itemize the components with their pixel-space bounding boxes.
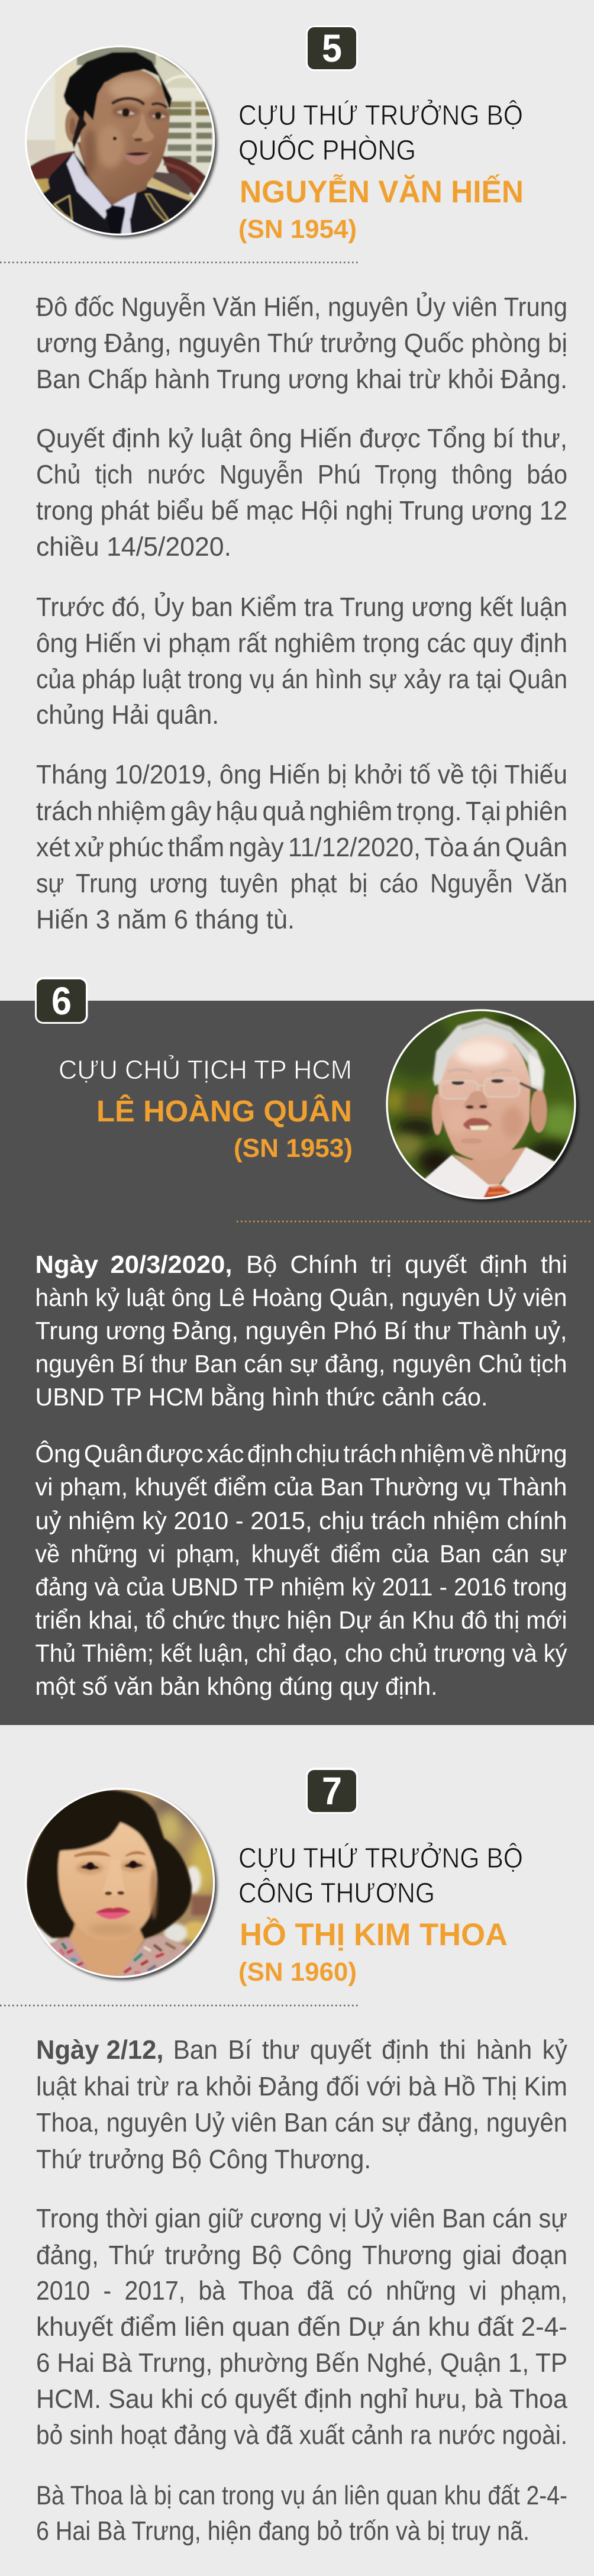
number badge 6 bbox=[35, 977, 88, 1024]
panel: person 6 bbox=[0, 977, 594, 1725]
text block: biography 7: 6 Hai Bà Trưng, hiện đang bỏ trốn và bị truy nã. bbox=[36, 2516, 530, 2546]
heading: role and name 6: CỰU CHỦ TỊCH TP HCM bbox=[59, 1055, 352, 1085]
text block: biography 6: uỷ nhiệm kỳ 2010 - 2015, chịu trách nhiệm chính bbox=[35, 1507, 567, 1534]
text block: biography 7: luật khai trừ ra khỏi Đảng đối với bà Hồ Thị Kim bbox=[36, 2071, 567, 2101]
portrait: Nguyễn Văn Hiến bbox=[24, 43, 219, 241]
text block: biography 5: Trước đó, Ủy ban Kiểm tra Trung ương kết luận bbox=[36, 592, 567, 622]
number badge 6: 6 bbox=[51, 979, 72, 1023]
text block: biography 5: Đô đốc Nguyễn Văn Hiến, nguyên Ủy viên Trung bbox=[36, 292, 567, 322]
text block: biography 6 bbox=[35, 1250, 567, 1700]
number badge 7 bbox=[306, 1768, 358, 1814]
text block: biography 6: Trung ương Đảng, nguyên Phó Bí thư Thành uỷ, bbox=[35, 1317, 567, 1345]
text block: biography 6: về những vi phạm, khuyết điểm của Ban cán sự bbox=[35, 1540, 567, 1568]
panel: person 7 bbox=[0, 1768, 568, 2546]
text block: biography 5: chủng Hải quân. bbox=[36, 699, 219, 730]
text block: biography 5: ông Hiến vi phạm rất nghiêm trọng các quy định bbox=[36, 628, 567, 658]
text block: biography 7: Ban Bí thư quyết định thi hành kỷ bbox=[173, 2035, 567, 2065]
heading: role and name 5: CỰU THỨ TRƯỞNG BỘ bbox=[238, 99, 523, 131]
text block: biography 6: Ngày 20/3/2020, bbox=[35, 1250, 232, 1278]
text block: biography 7: Ngày 2/12, bbox=[36, 2035, 163, 2065]
text block: biography 5: xét xử phúc thẩm ngày 11/12/2020, Tòa án Quân bbox=[36, 832, 567, 862]
panel: person 5 bbox=[0, 25, 567, 934]
heading: role and name 5: (SN 1954) bbox=[238, 215, 357, 244]
text block: biography 5: ương Đảng, nguyên Thứ trưởng Quốc phòng bị bbox=[36, 328, 567, 358]
text block: biography 7: HCM. Sau khi có quyết định nghỉ hưu, bà Thoa bbox=[36, 2384, 568, 2414]
number badge 7: 7 bbox=[322, 1769, 342, 1813]
text block: biography 6: Bộ Chính trị quyết định thi bbox=[246, 1250, 567, 1278]
text block: biography 5: Hiến 3 năm 6 tháng tù. bbox=[36, 904, 295, 934]
text block: biography 6: UBND TP HCM bằng hình thức cảnh cáo. bbox=[35, 1383, 488, 1411]
text block: biography 5: trách nhiệm gây hậu quả nghiêm trọng. Tại phiên bbox=[36, 796, 567, 826]
heading: role and name 5 bbox=[238, 99, 524, 244]
heading: role and name 7 bbox=[238, 1842, 523, 1987]
text block: biography 5: trong phát biểu bế mạc Hội nghị Trung ương 12 bbox=[36, 495, 567, 525]
text block: biography 6: một số văn bản không đúng quy định. bbox=[35, 1672, 438, 1700]
text block: biography 6: đảng và của UBND TP nhiệm kỳ 2011 - 2016 trong bbox=[35, 1573, 567, 1601]
text block: biography 7: 6 Hai Bà Trưng, phường Bến Nghé, Quận 1, TP bbox=[36, 2348, 567, 2378]
text block: biography 6: hành kỷ luật ông Lê Hoàng Quân, nguyên Uỷ viên bbox=[35, 1284, 567, 1311]
text block: biography 5: Quyết định kỷ luật ông Hiến được Tổng bí thư, bbox=[36, 423, 567, 453]
heading: role and name 5: QUỐC PHÒNG bbox=[238, 134, 416, 166]
text block: biography 6: vi phạm, khuyết điểm của Ban Thường vụ Thành bbox=[35, 1473, 567, 1501]
heading: role and name 7: CỰU THỨ TRƯỞNG BỘ bbox=[238, 1842, 523, 1874]
heading: role and name 7: CÔNG THƯƠNG bbox=[238, 1878, 435, 1909]
text block: biography 6: triển khai, tổ chức thực hiện Dự án Khu đô thị mới bbox=[35, 1606, 567, 1634]
dark panel background bbox=[0, 1001, 594, 1725]
heading: role and name 7: (SN 1960) bbox=[238, 1958, 357, 1987]
portrait: Hồ Thị Kim Thoa bbox=[24, 1787, 219, 1981]
text block: biography 5: Tháng 10/2019, ông Hiến bị khởi tố về tội Thiếu bbox=[36, 759, 567, 789]
text block: biography 6: Ông Quân được xác định chịu trách nhiệm về những bbox=[35, 1440, 567, 1468]
text block: biography 7: đảng, Thứ trưởng Bộ Công Thương giai đoạn bbox=[36, 2240, 567, 2270]
text block: biography 7: khuyết điểm liên quan đến Dự án khu đất 2-4- bbox=[36, 2311, 567, 2342]
number badge 5: 5 bbox=[322, 26, 342, 70]
text block: biography 6: nguyên Bí thư Ban cán sự đảng, nguyên Chủ tịch bbox=[35, 1350, 567, 1378]
heading: role and name 6: (SN 1953) bbox=[234, 1134, 353, 1163]
portrait: Lê Hoàng Quân bbox=[383, 1008, 580, 1202]
text block: biography 7: Thứ trưởng Bộ Công Thương. bbox=[36, 2144, 371, 2174]
text block: biography 7 bbox=[36, 2035, 568, 2546]
text block: biography 7: Thoa, nguyên Uỷ viên Ban cán sự đảng, nguyên bbox=[36, 2107, 567, 2137]
heading: role and name 7: HỒ THỊ KIM THOA bbox=[240, 1917, 508, 1952]
number badge 5 bbox=[306, 25, 358, 71]
text block: biography 6: Thủ Thiêm; kết luận, chỉ đạo, cho chủ trương và ký bbox=[35, 1639, 567, 1667]
heading: role and name 5: NGUYỄN VĂN HIẾN bbox=[240, 174, 524, 209]
text block: biography 5: chiều 14/5/2020. bbox=[36, 531, 231, 562]
text block: biography 5: Ban Chấp hành Trung ương khai trừ khỏi Đảng. bbox=[36, 364, 567, 394]
heading: role and name 6: LÊ HOÀNG QUÂN bbox=[96, 1094, 352, 1128]
heading: role and name 6 bbox=[59, 1055, 353, 1163]
text block: biography 5 bbox=[36, 292, 567, 934]
